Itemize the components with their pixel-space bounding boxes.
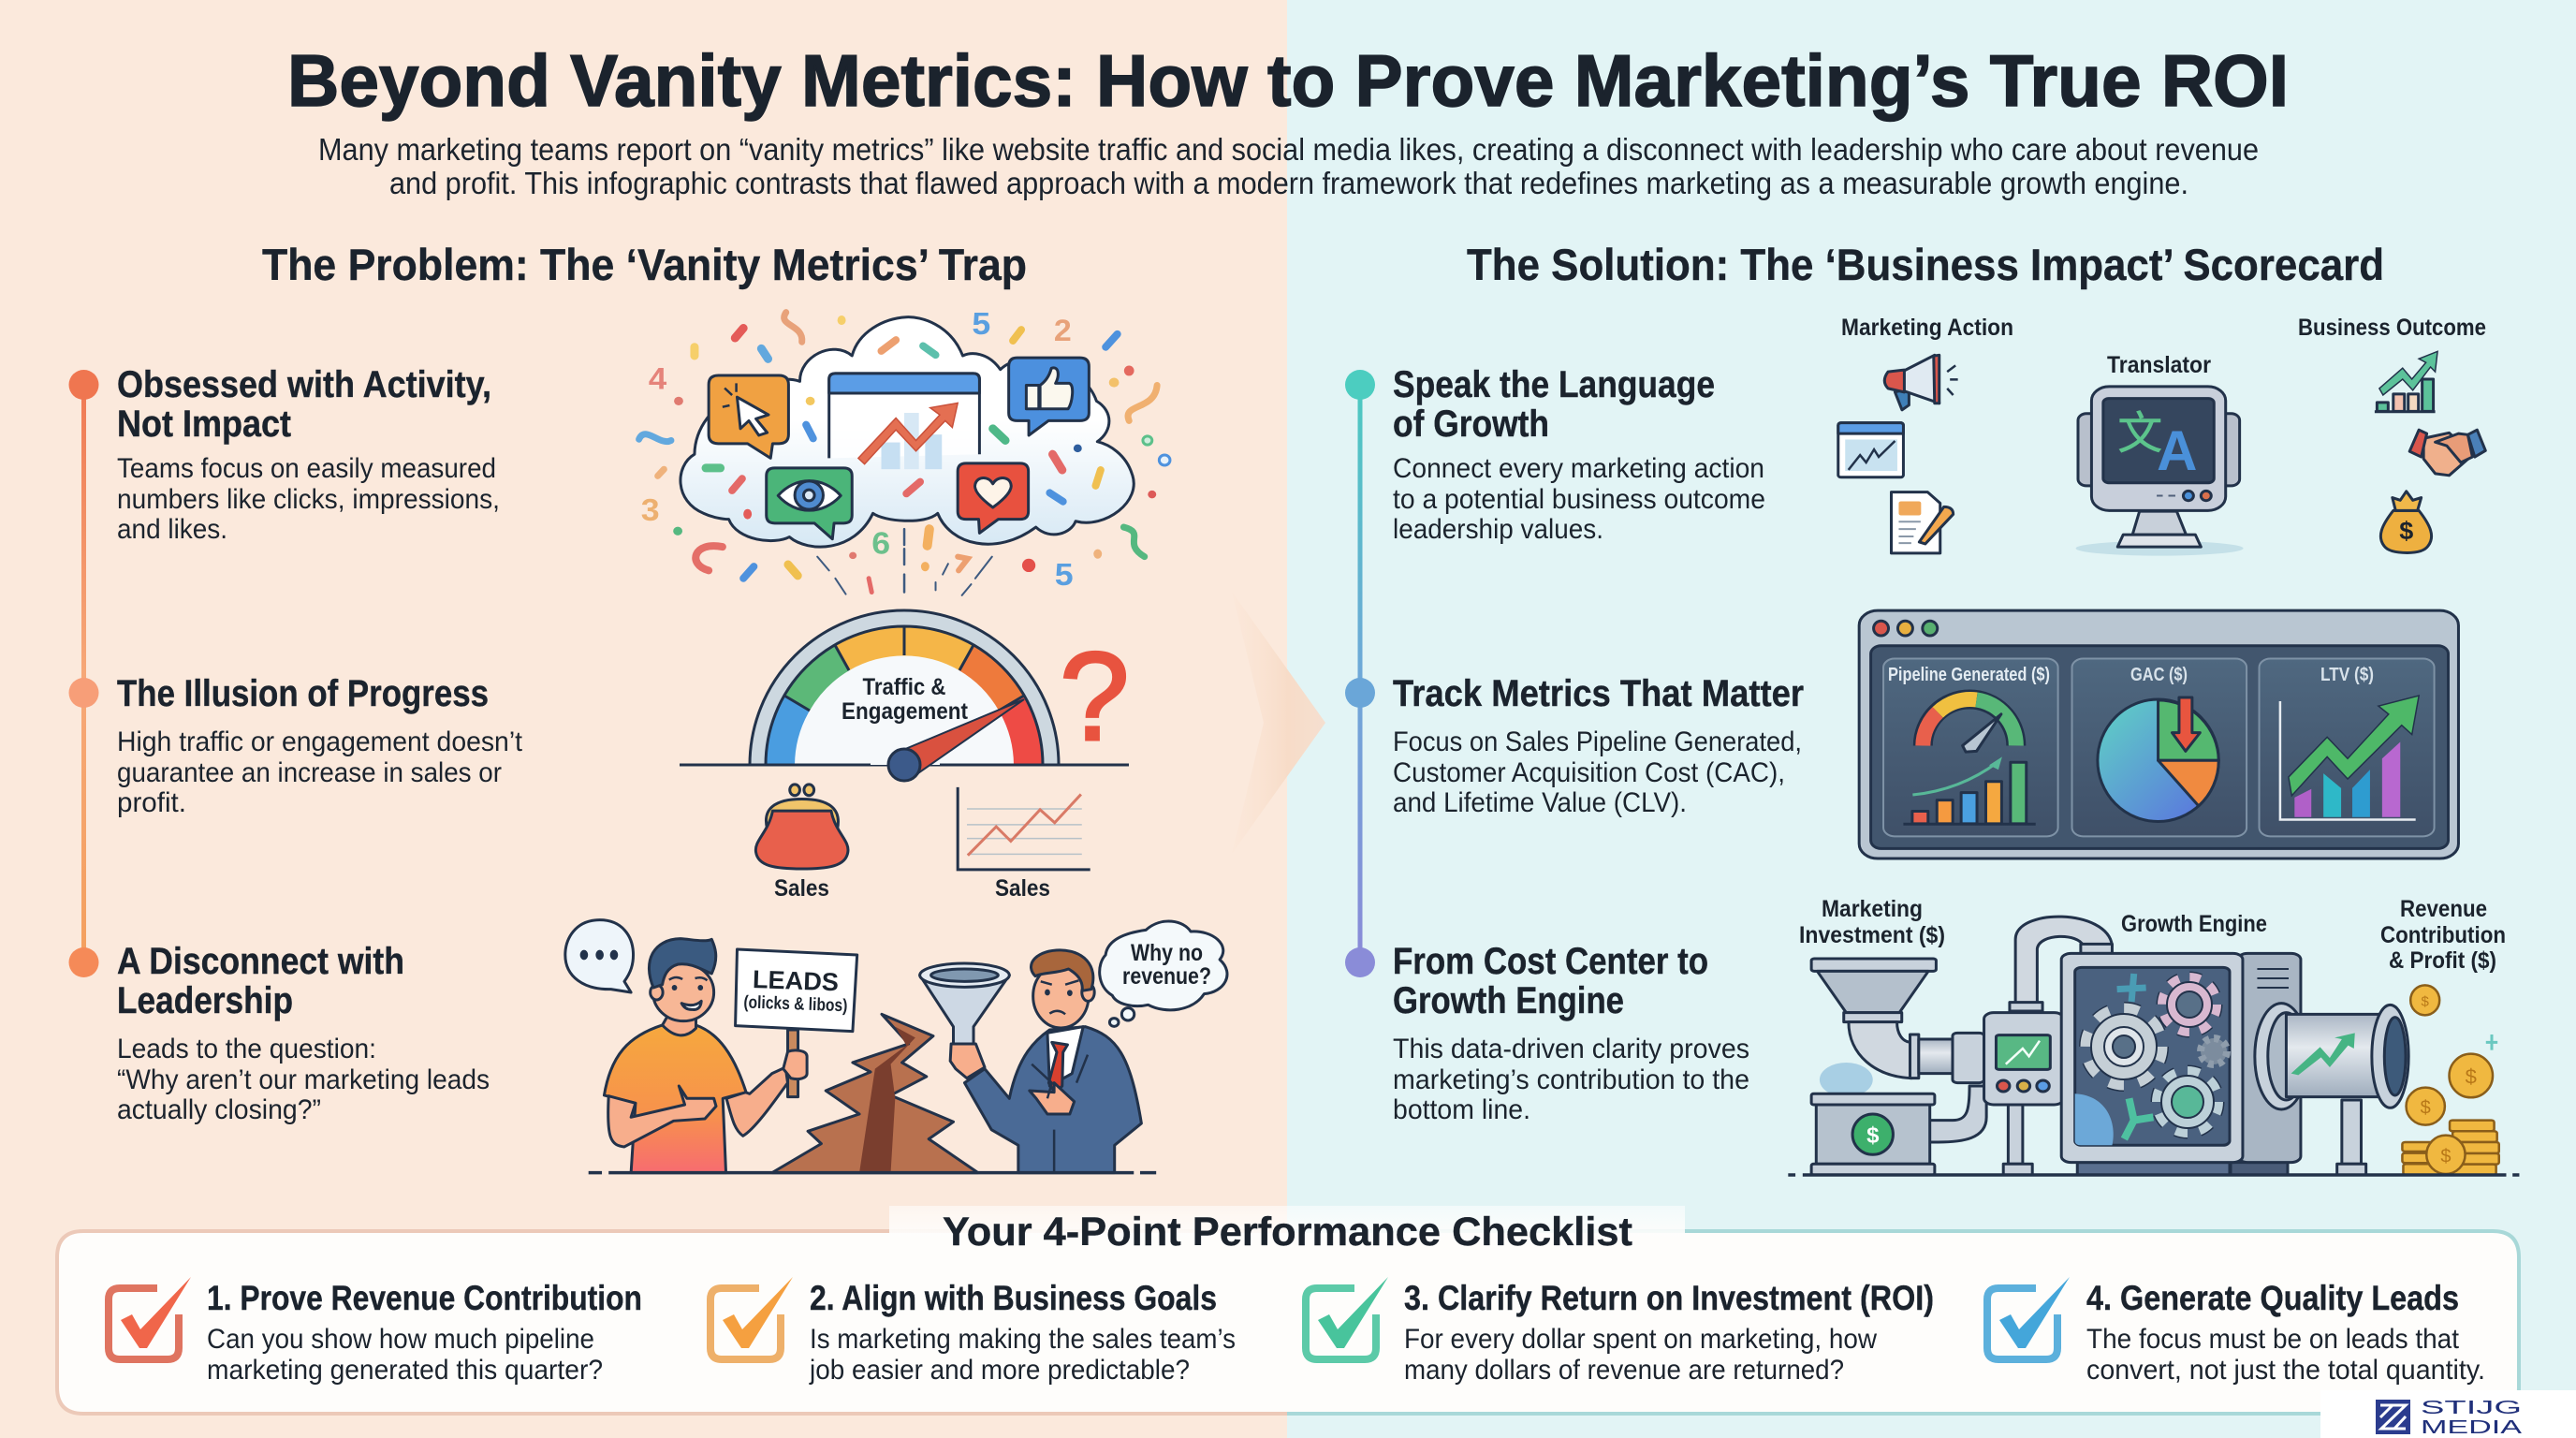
icon: red checkbox bbox=[109, 1277, 191, 1359]
coin dollar signs bbox=[2421, 993, 2477, 1167]
confetti dots and digits: 4 bbox=[649, 361, 666, 396]
subtitle: and profit. This infographic contrasts that flawed approach with a modern framework that redefines marketing as a measurable growth engine. bbox=[389, 166, 2188, 200]
icon: green checkbox bbox=[1306, 1277, 1388, 1359]
chart: flat sales bbox=[958, 787, 1090, 870]
illustration: marketer and leader disconnect bbox=[565, 920, 1227, 1173]
icon: like bubble bbox=[1009, 358, 1089, 435]
growth engine labels: Revenue bbox=[2400, 896, 2487, 922]
text block: speak the language: Connect every marketing action bbox=[1393, 453, 1764, 484]
logo: stijg media: MEDIA bbox=[2421, 1417, 2523, 1438]
text block: illusion of progress: profit. bbox=[117, 787, 186, 818]
thought bubble text: Why no bbox=[1131, 940, 1203, 966]
subtitle bbox=[318, 132, 2259, 200]
gear: large bbox=[2087, 1010, 2160, 1083]
heading: the problem: The Problem: The ‘Vanity Metrics’ Trap bbox=[262, 240, 1027, 289]
icon: blue checkbox bbox=[1987, 1277, 2070, 1359]
background: left peach half bbox=[0, 0, 1287, 1438]
leader figure bbox=[950, 950, 1141, 1173]
icon: browser chart bbox=[1838, 423, 1903, 477]
confetti dots and digits: 5 bbox=[972, 307, 990, 342]
text block: disconnect with leadership: A Disconnect with bbox=[117, 941, 404, 982]
checklist item 1: Can you show how much pipeline bbox=[207, 1324, 594, 1355]
dashboard card labels bbox=[1888, 665, 2374, 685]
checklist item 2 bbox=[710, 1277, 1236, 1386]
growth engine labels: Contribution bbox=[2380, 922, 2506, 948]
dashboard cards bbox=[1883, 659, 2435, 836]
text block: illusion of progress bbox=[117, 673, 523, 818]
translator diagram labels: Marketing Action bbox=[1841, 315, 2013, 341]
gauge dial bbox=[750, 610, 1059, 765]
icon: purse bbox=[755, 785, 848, 869]
checklist item 1: marketing generated this quarter? bbox=[207, 1355, 603, 1386]
crack in the ground bbox=[772, 1014, 978, 1173]
text block: disconnect with leadership: Leadership bbox=[117, 980, 293, 1021]
text block: obsessed with activity: Not Impact bbox=[117, 404, 291, 445]
translator diagram labels: Translator bbox=[2107, 352, 2211, 378]
icon: megaphone bbox=[1884, 355, 1958, 410]
text block: illusion of progress: guarantee an increase in sales or bbox=[117, 757, 502, 788]
icon: money bag: $ bbox=[2399, 517, 2413, 545]
input funnel and bin bbox=[1811, 959, 1986, 1175]
dashboard card labels: LTV ($) bbox=[2320, 665, 2374, 685]
growth engine labels: Investment ($) bbox=[1799, 922, 1945, 948]
question mark: ? bbox=[1060, 627, 1130, 767]
thought bubble bbox=[1100, 921, 1227, 1026]
checklist item 2: 2. Align with Business Goals bbox=[810, 1279, 1217, 1317]
control valve with screen bbox=[1984, 917, 2112, 1175]
output pipe bbox=[2255, 1004, 2408, 1175]
gear: pink bbox=[2163, 978, 2216, 1031]
leads sign bbox=[736, 949, 857, 1097]
confetti dots and digits: 5 bbox=[1055, 558, 1074, 593]
illustration: gauge: Engagement bbox=[842, 698, 969, 725]
checklist item 4: The focus must be on leads that bbox=[2086, 1324, 2460, 1355]
needle bbox=[899, 699, 1024, 777]
text block: speak the language bbox=[1393, 364, 1765, 545]
icon: translator monitor: A bbox=[2157, 419, 2197, 482]
LTV growth chart bbox=[2280, 696, 2419, 820]
text block: illusion of progress: High traffic or engagement doesn’t bbox=[117, 726, 523, 757]
leads sign: (olicks & libos) bbox=[743, 992, 848, 1016]
confetti dots and digits bbox=[641, 307, 1170, 593]
thought bubble text bbox=[1122, 940, 1211, 990]
input funnel and bin: $ bbox=[1866, 1123, 1880, 1149]
checklist item 4: 4. Generate Quality Leads bbox=[2086, 1279, 2459, 1317]
text block: speak the language: Speak the Language bbox=[1393, 364, 1715, 405]
baseline bbox=[680, 764, 1129, 766]
left timeline bbox=[69, 370, 99, 977]
growth engine labels bbox=[1799, 896, 2506, 974]
checklist item 3: 3. Clarify Return on Investment (ROI) bbox=[1404, 1279, 1934, 1317]
checklist item 3 bbox=[1306, 1277, 1934, 1386]
checklist title: Your 4-Point Performance Checklist bbox=[943, 1210, 1632, 1255]
text block: speak the language: of Growth bbox=[1393, 404, 1549, 445]
translator diagram labels bbox=[1841, 315, 2486, 378]
checklist panel bbox=[57, 1231, 2519, 1414]
funnel bbox=[920, 963, 1009, 1046]
leads sign: LEADS bbox=[752, 965, 839, 996]
heading: the solution: The Solution: The ‘Business Impact’ Scorecard bbox=[1467, 240, 2384, 289]
label: sales under chart: Sales bbox=[995, 875, 1050, 902]
right timeline bbox=[1345, 370, 1375, 977]
illustration: vanity metric cloud bbox=[639, 307, 1170, 595]
dashboard card labels: GAC ($) bbox=[2130, 665, 2188, 685]
text block: growth engine: marketing’s contribution to the bbox=[1393, 1064, 1749, 1095]
icon: click bubble bbox=[709, 375, 788, 458]
coin dollar signs: $ bbox=[2422, 993, 2430, 1009]
icon: handshake bbox=[2409, 430, 2485, 476]
text block: obsessed with activity bbox=[117, 364, 500, 545]
confetti dots and digits: 6 bbox=[871, 526, 890, 561]
text block: obsessed with activity: Obsessed with Activity, bbox=[117, 364, 491, 405]
machine gears bbox=[2087, 978, 2227, 1132]
metrics dashboard bbox=[1859, 610, 2458, 858]
title: Beyond Vanity Metrics: How to Prove Marketing’s True ROI bbox=[287, 39, 2289, 122]
confetti dots and digits: 2 bbox=[1054, 314, 1072, 347]
text block: track metrics: Customer Acquisition Cost (CAC), bbox=[1393, 757, 1785, 788]
growth engine labels: & Profit ($) bbox=[2389, 947, 2496, 974]
browser window bbox=[829, 374, 979, 469]
coins bbox=[2402, 985, 2499, 1175]
central transition chevron arrow bbox=[1232, 592, 1325, 854]
pipeline gauge and bars bbox=[1903, 699, 2036, 824]
text block: disconnect with leadership: “Why aren’t our marketing leads bbox=[117, 1064, 490, 1095]
confetti bbox=[639, 313, 1157, 595]
text block: obsessed with activity: and likes. bbox=[117, 514, 227, 545]
icon: orange checkbox bbox=[710, 1277, 793, 1359]
icon: growth chart bbox=[2375, 351, 2437, 412]
text block: track metrics: and Lifetime Value (CLV). bbox=[1393, 787, 1687, 818]
growth engine labels: Marketing bbox=[1822, 896, 1923, 922]
icon: heart bubble bbox=[958, 463, 1029, 533]
checklist item 1: 1. Prove Revenue Contribution bbox=[207, 1279, 642, 1317]
text block: obsessed with activity: numbers like clicks, impressions, bbox=[117, 484, 500, 515]
dashboard card labels: Pipeline Generated ($) bbox=[1888, 665, 2050, 685]
text block: illusion of progress: The Illusion of Progress bbox=[117, 673, 489, 714]
gear: faded small bbox=[2201, 1038, 2227, 1064]
background: right teal half bbox=[1287, 0, 2576, 1438]
text block: disconnect with leadership: Leads to the question: bbox=[117, 1034, 376, 1064]
label: sales under purse: Sales bbox=[774, 875, 829, 902]
icon: translator monitor: 文 bbox=[2117, 409, 2162, 459]
thought bubble text: revenue? bbox=[1122, 963, 1211, 990]
icon: eye bubble bbox=[767, 468, 852, 539]
CAC pie chart bbox=[2098, 697, 2218, 822]
text block: track metrics bbox=[1393, 673, 1804, 818]
gauge label: Traffic & bbox=[863, 674, 945, 700]
logo: stijg media bbox=[2320, 1390, 2576, 1438]
text block: growth engine bbox=[1393, 941, 1749, 1125]
icon: document with pencil bbox=[1891, 492, 1954, 553]
text block: speak the language: leadership values. bbox=[1393, 514, 1603, 545]
translator diagram labels: Business Outcome bbox=[2298, 315, 2486, 341]
checklist item 3: For every dollar spent on marketing, how bbox=[1404, 1324, 1877, 1355]
coin dollar signs: $ bbox=[2440, 1147, 2451, 1167]
text block: growth engine: bottom line. bbox=[1393, 1094, 1530, 1125]
text block: speak the language: to a potential business outcome bbox=[1393, 484, 1765, 515]
machine body bbox=[2061, 953, 2301, 1175]
text block: track metrics: Focus on Sales Pipeline Generated, bbox=[1393, 726, 1802, 757]
text block: track metrics: Track Metrics That Matter bbox=[1393, 673, 1804, 714]
text block: disconnect with leadership: actually closing?” bbox=[117, 1094, 321, 1125]
growth engine labels: Growth Engine bbox=[2121, 911, 2267, 937]
text block: obsessed with activity: Teams focus on easily measured bbox=[117, 453, 496, 484]
translator diagram icons bbox=[1838, 351, 2485, 556]
confetti dots and digits: 3 bbox=[641, 493, 660, 528]
icon: money bag bbox=[2380, 492, 2432, 552]
checklist item 1 bbox=[109, 1277, 642, 1386]
checklist item 3: many dollars of revenue are returned? bbox=[1404, 1355, 1844, 1386]
growth engine machine bbox=[1788, 917, 2519, 1175]
logo: stijg media: STIJG bbox=[2421, 1398, 2522, 1418]
checklist item 2: Is marketing making the sales team’s bbox=[810, 1324, 1236, 1355]
icon: translator monitor bbox=[2076, 387, 2244, 556]
coin dollar signs: $ bbox=[2421, 1097, 2431, 1118]
text block: growth engine: This data-driven clarity proves bbox=[1393, 1034, 1749, 1064]
subtitle: Many marketing teams report on “vanity metrics” like website traffic and social media likes, creating a disconnect with leadership who care about revenue bbox=[318, 132, 2259, 167]
text block: growth engine: From Cost Center to bbox=[1393, 941, 1708, 982]
illustration: gauge bbox=[680, 610, 1130, 781]
text block: growth engine: Growth Engine bbox=[1393, 980, 1624, 1021]
checklist item 4 bbox=[1987, 1277, 2485, 1386]
speech bubble bbox=[565, 920, 634, 992]
coin dollar signs: $ bbox=[2466, 1064, 2477, 1088]
checklist title backing bbox=[889, 1206, 1685, 1240]
checklist item 4: convert, not just the total quantity. bbox=[2086, 1355, 2485, 1386]
text block: disconnect with leadership bbox=[117, 941, 490, 1125]
gear: lower bbox=[2158, 1072, 2217, 1132]
marketer figure bbox=[604, 939, 788, 1173]
checklist item 2: job easier and more predictable? bbox=[809, 1355, 1190, 1386]
cloud shape bbox=[681, 317, 1134, 547]
